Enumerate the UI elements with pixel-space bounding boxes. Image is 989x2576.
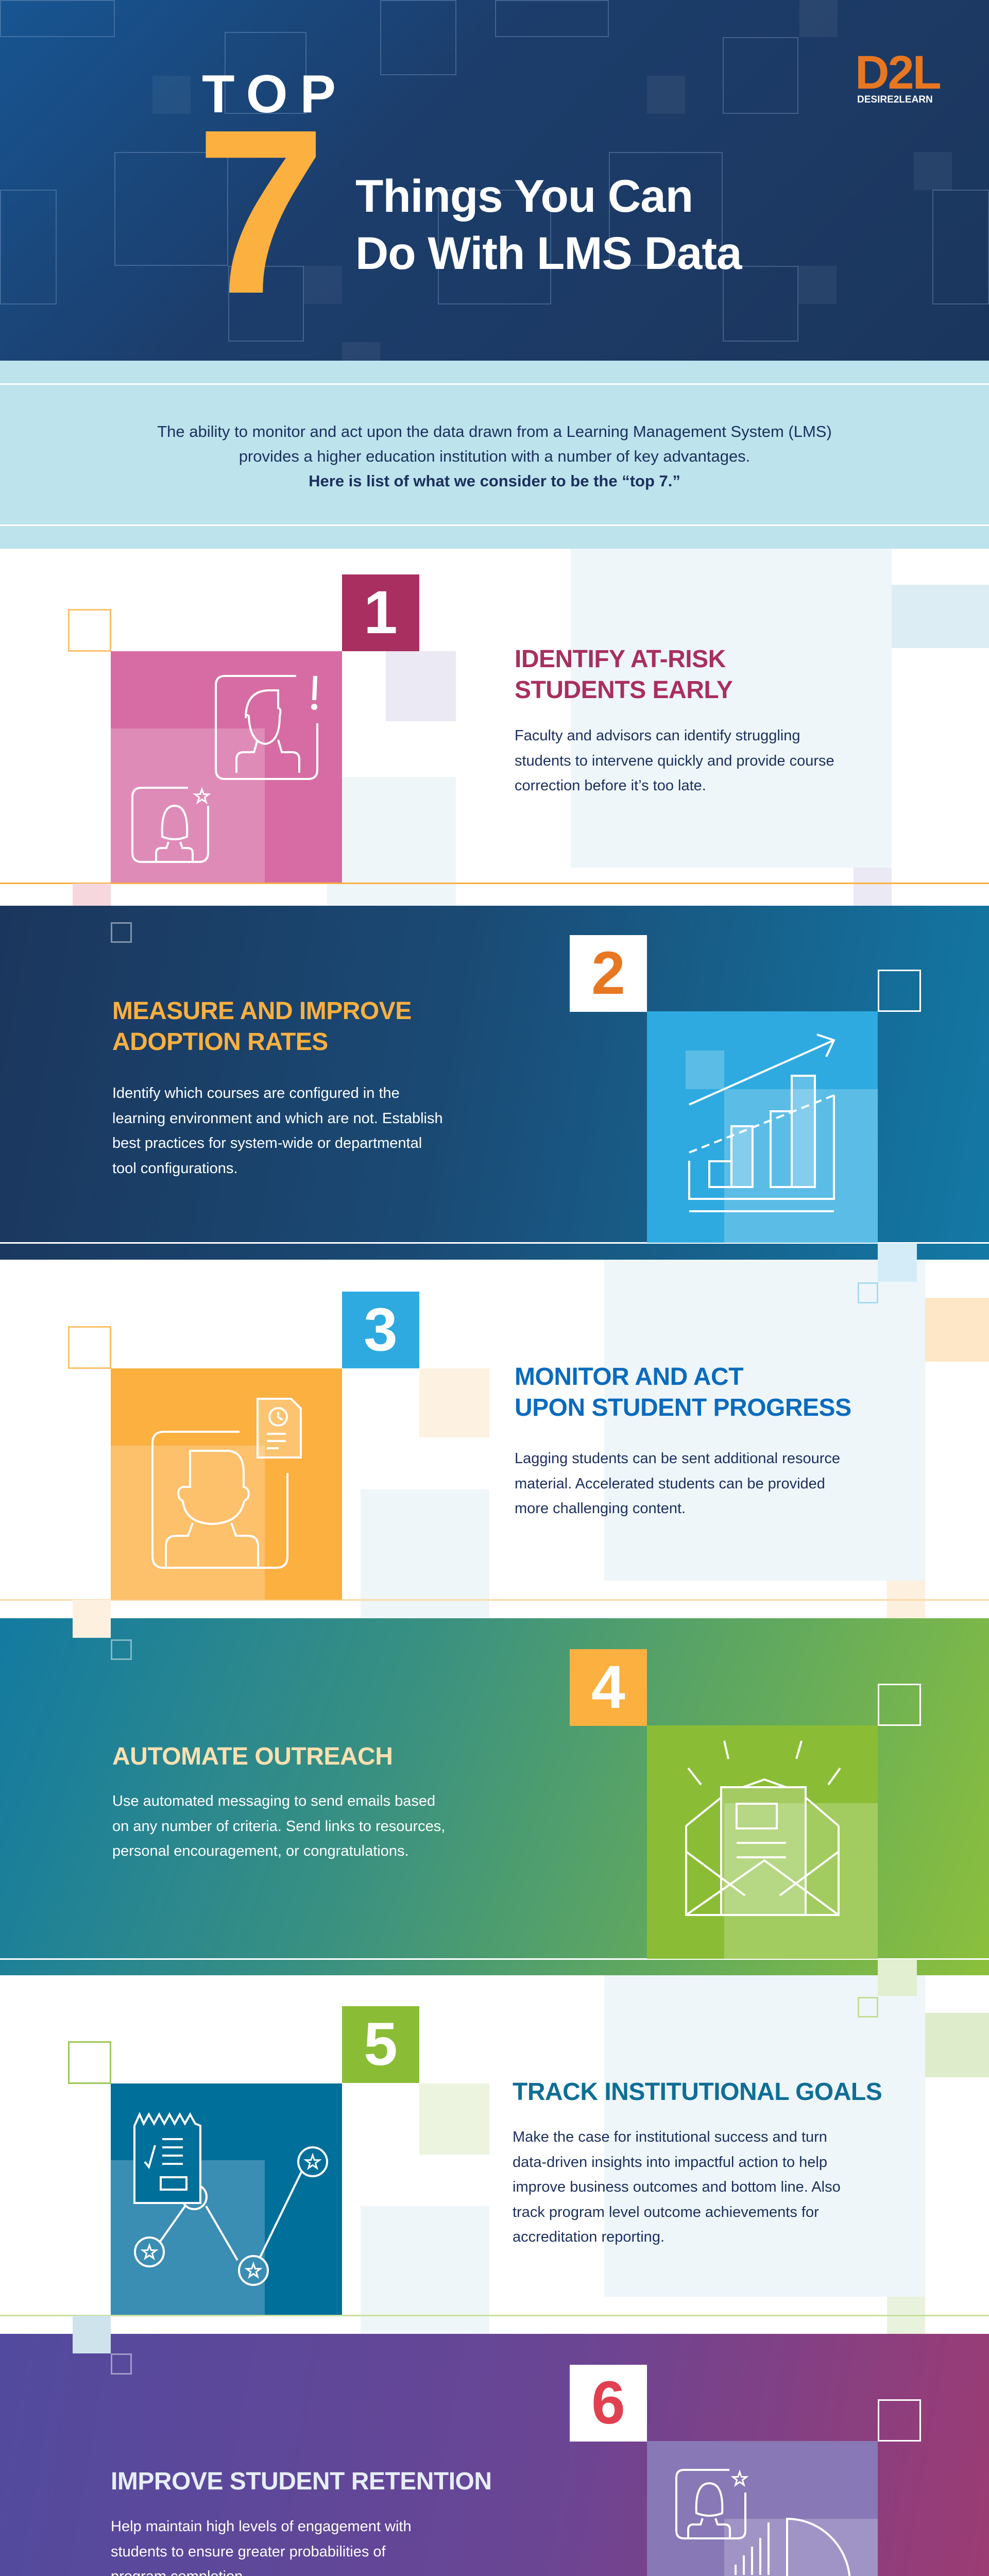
heading 4: AUTOMATE OUTREACH [112, 1743, 393, 1770]
heading 2: ADOPTION RATES [112, 1028, 328, 1056]
number box 2: 2 [591, 939, 625, 1007]
panel: section 1 background [0, 549, 989, 906]
panel: section 4 background [0, 1618, 989, 1975]
body 4 [112, 1793, 445, 1859]
icon panel 2: adoption chart [647, 1011, 878, 1243]
title: Things You Can Do With LMS Data [355, 170, 743, 279]
body 6: students to ensure greater probabilities of [111, 2543, 386, 2560]
intro text: The ability to monitor and act upon the data drawn from a Learning Management System (LMS) [157, 422, 832, 440]
heading 1 [515, 646, 732, 704]
icon panel 3: student progress [111, 1368, 342, 1600]
body 5: data-driven insights into impactful action to help [513, 2154, 827, 2170]
number box 5: 5 [364, 2010, 398, 2078]
number box 3 [342, 1292, 419, 1368]
body 2 [112, 1085, 443, 1177]
heading 5: TRACK INSTITUTIONAL GOALS [513, 2078, 882, 2106]
body 4: Use automated messaging to send emails based [112, 1793, 435, 1809]
body 5 [513, 2129, 841, 2245]
body 1: Faculty and advisors can identify struggling [515, 727, 800, 744]
number box 4: 4 [591, 1653, 625, 1721]
body 5: Make the case for institutional success and turn [513, 2129, 827, 2145]
header banner [0, 0, 989, 361]
title: TOP: TOP [202, 64, 348, 124]
heading 3: MONITOR AND ACT [515, 1363, 743, 1391]
title: Things You Can Do With LMS Data: Things You Can [355, 170, 693, 222]
heading 2 [112, 997, 412, 1056]
icon panel 5: institutional goals [111, 2083, 342, 2315]
intro text: Here is list of what we consider to be the “top 7.” [309, 472, 680, 490]
heading 3 [515, 1363, 851, 1421]
body 5: track program level outcome achievements for [513, 2204, 819, 2221]
body 3 [515, 1450, 840, 1517]
body 1: students to intervene quickly and provide course [515, 752, 834, 769]
icon panel 6: retention [647, 2441, 878, 2576]
number box 3: 3 [364, 1296, 398, 1364]
intro text: provides a higher education institution with a number of key advantages. [239, 447, 750, 465]
logo: D2L: DESIRE2LEARN [857, 94, 933, 105]
panel: section 2 background [0, 906, 989, 1260]
body 6 [111, 2518, 412, 2576]
body 1: correction before it’s too late. [515, 777, 706, 794]
icon panel 1: at-risk students [111, 651, 342, 883]
number box 5 [342, 2006, 419, 2083]
body 2: learning environment and which are not. Establish [112, 1110, 443, 1126]
number box 4 [570, 1649, 647, 1726]
number box 6: 6 [591, 2369, 625, 2437]
number box 1 [342, 574, 419, 651]
panel: section 3 background [0, 1260, 989, 1618]
icon panel 4: envelope [647, 1725, 878, 1959]
body 2: best practices for system-wide or departmental [112, 1135, 422, 1151]
body 6: Help maintain high levels of engagement with [111, 2518, 412, 2535]
heading 2: MEASURE AND IMPROVE [112, 997, 412, 1025]
body 1 [515, 727, 834, 794]
number box 1: 1 [364, 579, 398, 647]
panel: section 6 background [0, 2334, 989, 2576]
body 4: on any number of criteria. Send links to resources, [112, 1818, 445, 1834]
number box 2 [570, 935, 647, 1012]
heading 1: IDENTIFY AT-RISK [515, 646, 726, 673]
intro text [157, 422, 832, 490]
body 4: personal encouragement, or congratulations. [112, 1843, 409, 1859]
heading 3: UPON STUDENT PROGRESS [515, 1394, 851, 1421]
body 3: Lagging students can be sent additional resource [515, 1450, 840, 1467]
body 3: more challenging content. [515, 1500, 686, 1517]
heading 1: STUDENTS EARLY [515, 676, 732, 704]
title: big 7: 7 [196, 81, 326, 343]
body 3: material. Accelerated students can be provided [515, 1476, 825, 1492]
number box 6 [570, 2365, 647, 2442]
panel: section 5 background [0, 1975, 989, 2334]
intro band [0, 361, 989, 549]
body 5: improve business outcomes and bottom line. Also [513, 2179, 841, 2195]
logo: D2L: D2L [855, 46, 940, 99]
body 2: Identify which courses are configured in the [112, 1085, 400, 1101]
body 2: tool configurations. [112, 1160, 237, 1177]
body 5: accreditation reporting. [513, 2229, 664, 2245]
title: Things You Can Do With LMS Data: Do With LMS Data [355, 227, 742, 279]
heading 6: IMPROVE STUDENT RETENTION [111, 2468, 492, 2495]
